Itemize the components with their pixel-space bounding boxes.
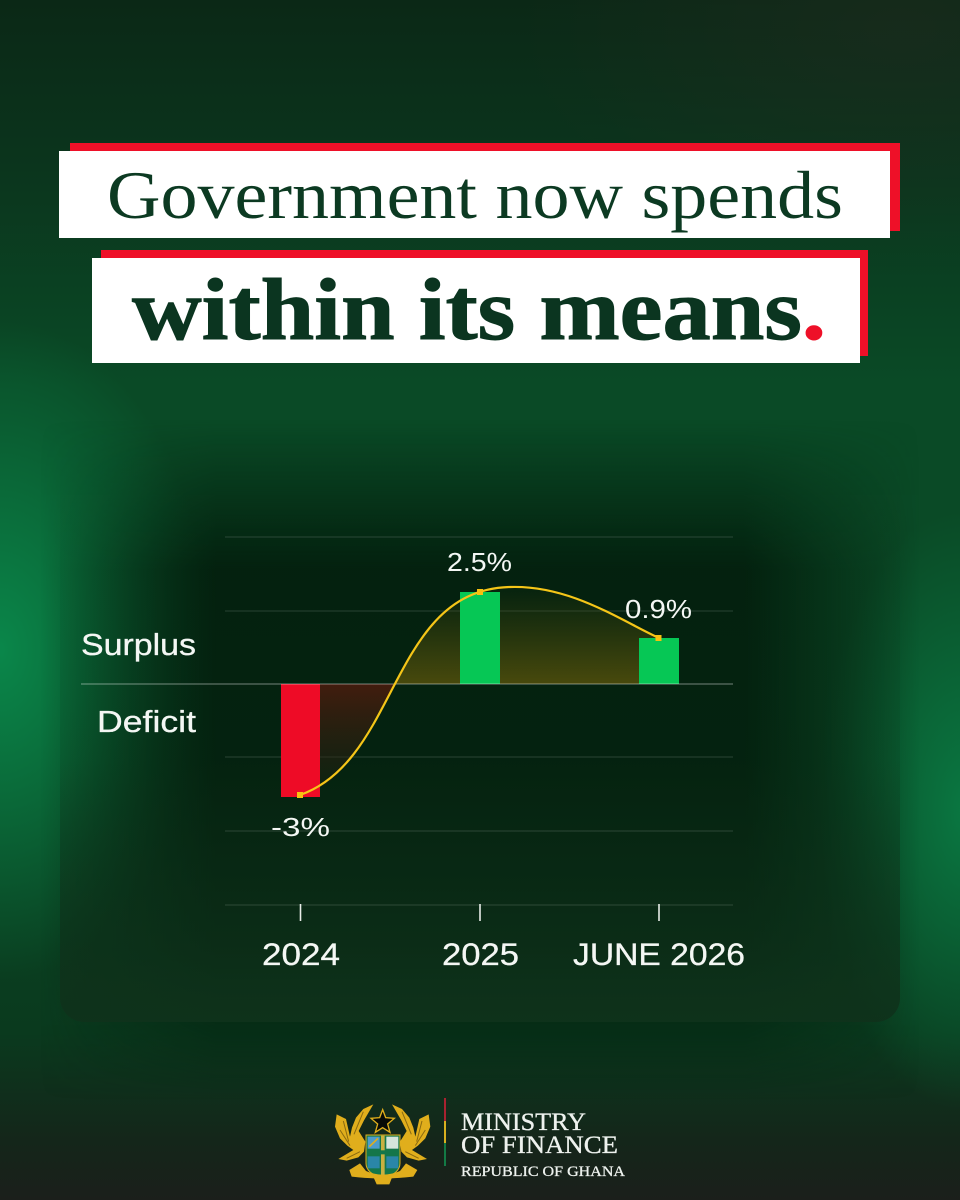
bar: June 2026: [639, 638, 679, 684]
title: [59, 143, 900, 363]
heading line 1: Government now spends: [107, 157, 843, 233]
shield: [366, 1135, 400, 1178]
grid lines: [225, 537, 733, 905]
trend curve: [300, 587, 659, 795]
axis label: 2024: 2024: [262, 936, 340, 972]
motto ribbon: [349, 1163, 417, 1184]
heading line 2: within its means .: [132, 262, 826, 359]
wordmark: [461, 1109, 625, 1180]
star: [371, 1110, 394, 1132]
right eagle: [392, 1104, 430, 1161]
area: deficit fill: [320, 684, 395, 787]
wordmark: REPUBLIC OF GHANA: [461, 1164, 625, 1180]
curve markers: [297, 589, 662, 798]
chart: surplus and deficit: [81, 537, 745, 972]
axis ticks: [300, 904, 659, 921]
heading line 1: [59, 143, 900, 238]
area: surplus fill: [396, 597, 656, 684]
footer logo: [335, 1098, 625, 1184]
value: 2.5%: 2.5%: [447, 549, 512, 577]
wordmark: OF FINANCE: [461, 1132, 618, 1159]
panel: chart card: [60, 440, 900, 1022]
icon: coat of arms: [335, 1104, 430, 1184]
axis label: surplus: Surplus: [81, 628, 196, 662]
left eagle: [335, 1104, 373, 1161]
value: -3%: -3%: [271, 814, 330, 842]
divider: national colours: [444, 1098, 446, 1166]
axis label: deficit: Deficit: [97, 705, 197, 739]
bar: 2025: [460, 592, 500, 684]
axis label: June 2026: JUNE 2026: [573, 936, 745, 972]
axis label: 2025: 2025: [442, 936, 519, 972]
value: 0.9%: 0.9%: [625, 596, 692, 624]
zero line: [81, 683, 733, 685]
bar: 2024: [281, 684, 320, 797]
wordmark: MINISTRY: [461, 1109, 586, 1136]
